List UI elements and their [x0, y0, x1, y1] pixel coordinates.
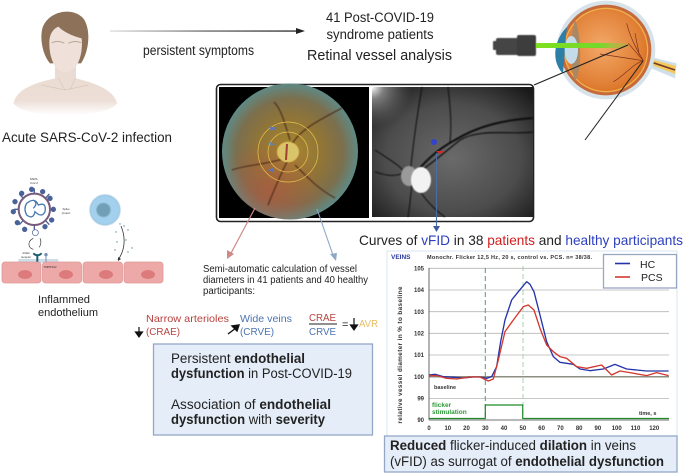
x axis labels: 40: [501, 426, 508, 432]
chart title: VEINS: [391, 254, 411, 261]
y axis labels: 99: [417, 396, 425, 402]
text: semi-automatic calculation: diameters in 41 patients and 40 healthy: [203, 275, 368, 286]
arrow: vFID curves: [433, 153, 440, 232]
text: wide veins: (CRVE): [240, 326, 274, 338]
icon: patient bust: [13, 12, 117, 115]
panel: conclusions: Persistent endothelial: [171, 351, 305, 366]
text: narrow arterioles: Narrow arterioles: [146, 313, 229, 325]
label: virus small text: [21, 177, 71, 269]
label: virus small text: CoV-2: [30, 181, 38, 185]
text: semi-automatic calculation: Semi-automatic calculation of vessel: [203, 264, 357, 275]
x axis labels: 70: [557, 426, 564, 432]
text: narrow arterioles: [146, 313, 229, 338]
annotations: baseline: [434, 385, 456, 391]
panel: vFID conclusion: Reduced flicker-induced dilation in veins: [390, 438, 636, 453]
label: acute infection: Acute SARS-CoV-2 infection: [2, 130, 172, 145]
x axis labels: 30: [482, 426, 489, 432]
label: inflamed endothelium: endothelium: [38, 307, 98, 319]
flicker stimulation trace: [429, 405, 669, 418]
icon: up arrow veins: [228, 325, 239, 334]
heading: vFID curves: Curves of vFID in 38 patients and healthy participants: [359, 232, 683, 248]
line chart: [414, 266, 669, 432]
PCS curve: [429, 305, 669, 381]
annotations: [432, 385, 656, 417]
y axis title: relative vessel diameter in % to baseline: [397, 286, 404, 424]
y axis labels: 103: [414, 310, 425, 316]
x axis labels: 60: [538, 426, 546, 432]
x axis labels: [427, 426, 660, 432]
x axis labels: 0: [427, 426, 431, 432]
panel: retinal images: [216, 84, 534, 222]
text: semi-automatic calculation: participants:: [203, 286, 255, 297]
annotations: stimulation: [432, 409, 467, 416]
panel: conclusions: dysfunction in Post-COVID-19: [171, 366, 352, 381]
x axis labels: 80: [576, 426, 583, 432]
arrow: to post-COVID patients: [110, 28, 305, 34]
label: inflamed endothelium: Inflammed: [38, 294, 90, 306]
heading: study group: [326, 10, 434, 42]
HC curve: [429, 282, 669, 378]
text: narrow arterioles: (CRAE): [146, 326, 180, 338]
x axis labels: 120: [649, 426, 660, 432]
label: virus small text: protein: [62, 211, 71, 215]
label: inflamed endothelium: [38, 294, 98, 319]
formula: AVR ratio: [309, 312, 378, 338]
x axis labels: 90: [595, 426, 602, 432]
x axis labels: 20: [463, 426, 470, 432]
panel: vFID conclusion: [384, 436, 677, 472]
connector lines: eye to images: [534, 45, 643, 140]
y axis labels: 102: [414, 332, 425, 338]
icon: SARS-CoV-2 virus and ACE2 binding: [11, 187, 58, 265]
legend: HC: [640, 259, 656, 271]
y axis labels: 90: [417, 418, 425, 424]
y axis labels: 104: [414, 288, 425, 294]
label: virus small text: Spike: [62, 207, 70, 211]
y axis labels: 100: [414, 375, 425, 381]
x axis labels: 10: [444, 426, 452, 432]
text: semi-automatic calculation: [203, 264, 368, 297]
heading: retinal vessel analysis: Retinal vessel analysis: [307, 48, 452, 64]
icon: fundus camera: [493, 35, 536, 56]
formula: AVR ratio: AVR: [359, 318, 378, 330]
arrow: arterioles calculation: [227, 208, 255, 259]
panel: vFID conclusion: (vFID) as surrogat of endothelial dysfunction: [390, 454, 664, 469]
panel: conclusions: dysfunction with severity: [171, 412, 325, 427]
formula: AVR ratio: CRAE: [309, 312, 336, 324]
image: colour fundus photograph: [219, 84, 369, 220]
panel: conclusions: [154, 344, 372, 435]
chart title: Monochr. Flicker 12,5 Hz, 20 s, control vs. PCS. n= 38/38.: [427, 255, 592, 261]
y axis labels: 105: [414, 266, 425, 272]
legend: PCS: [641, 272, 663, 284]
icon: eye anatomy: [555, 1, 677, 99]
light beam: [536, 43, 628, 48]
label: virus small text: receptor: [21, 255, 31, 259]
text: wide veins: Wide veins: [240, 313, 292, 325]
legend: [604, 254, 676, 288]
y axis labels: [414, 266, 425, 424]
formula: AVR ratio: =: [342, 319, 348, 331]
x axis labels: 110: [631, 426, 641, 432]
formula: AVR ratio: CRVE: [309, 326, 336, 338]
icon: immune cell with cytokines: [90, 195, 133, 261]
text: wide veins: [240, 313, 292, 338]
arrow: veins calculation: [317, 209, 337, 261]
icon: down arrow arterioles: [136, 327, 142, 337]
label: virus small text: TMPRSS2: [43, 265, 57, 269]
label: virus small text: SARS-: [30, 177, 38, 181]
annotations: flicker: [432, 402, 452, 409]
endothelial cells: [2, 262, 163, 283]
panel: vFID chart: [387, 251, 677, 436]
label: persistent symptoms: persistent symptoms: [143, 43, 254, 58]
panel: conclusions: Association of endothelial: [171, 397, 331, 412]
annotations: time, s: [639, 411, 656, 417]
label: virus small text: ACE2: [22, 251, 30, 255]
heading: study group: 41 Post-COVID-19: [326, 10, 434, 25]
heading: study group: syndrome patients: [326, 27, 434, 42]
image: grayscale vessel analyzer: [372, 87, 533, 217]
x axis labels: 50: [520, 426, 527, 432]
y axis labels: 101: [414, 353, 425, 359]
x axis labels: 100: [612, 426, 622, 432]
